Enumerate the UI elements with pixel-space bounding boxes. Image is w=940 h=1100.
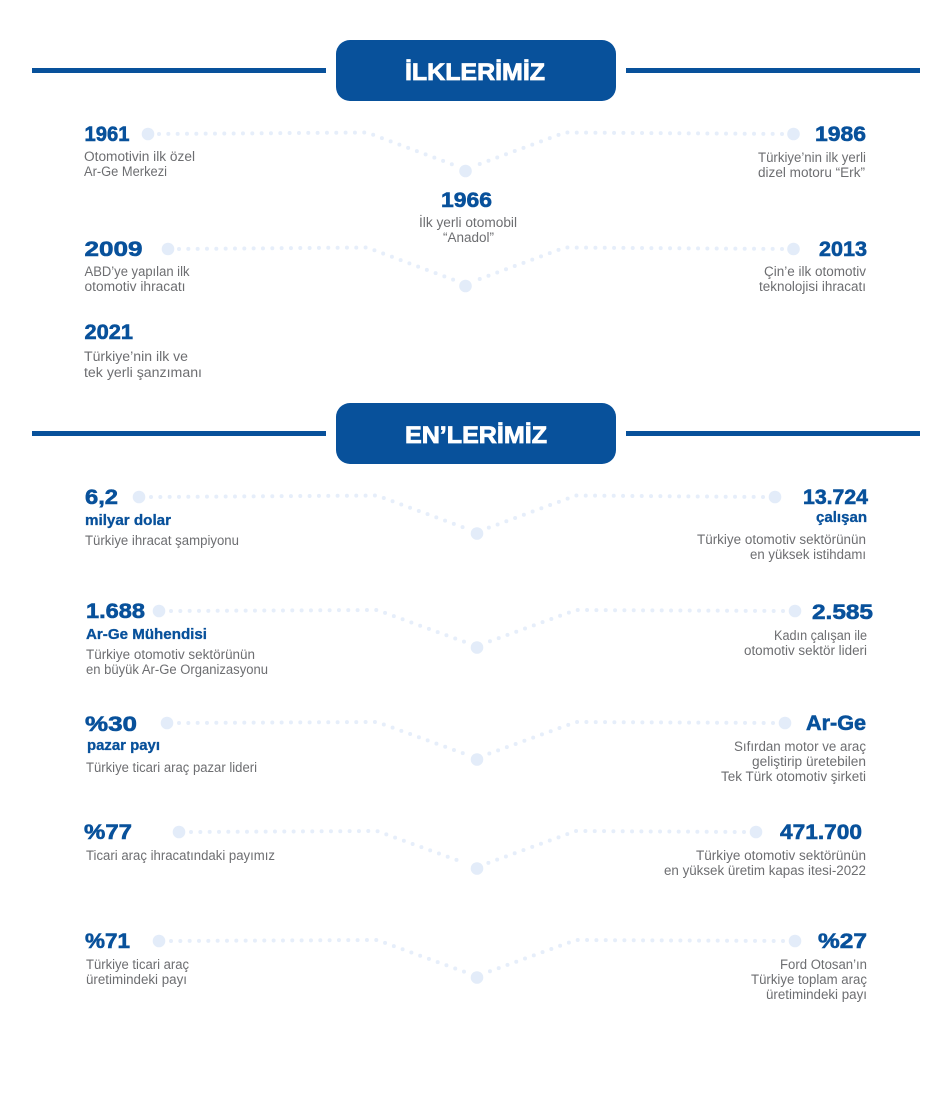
stat: 6,2 milyar dolar [85, 485, 239, 548]
milestone: 1986 [758, 122, 866, 180]
connector: row 4 [173, 826, 762, 875]
milestone: 2013: teknolojisi ihracatı [759, 279, 866, 294]
connector: row 5 [153, 935, 801, 984]
stat: 1.688 Ar-Ge Mühendisi: en büyük Ar-Ge Organizasyonu [86, 662, 268, 677]
connector: row 2 [153, 605, 801, 654]
heading: İlklerimiz banner: İLKLERİMİZ [405, 59, 545, 86]
stat: Ar-Ge: Ar-Ge [806, 711, 866, 735]
milestone: 2021: tek yerli şanzımanı [84, 365, 202, 380]
heading: En'lerimiz banner: EN’LERİMİZ [405, 422, 547, 449]
milestone: 2021: 2021 [84, 320, 133, 344]
stat: 6,2 milyar dolar: Türkiye ihracat şampiyonu [85, 533, 239, 548]
stat: %71 [85, 929, 189, 987]
stat: 2.585: otomotiv sektör lideri [744, 643, 867, 658]
heading: İlklerimiz banner [32, 40, 920, 101]
stat: 471.700: 471.700 [780, 820, 862, 844]
stat: 13.724 çalışan: en yüksek istihdamı [750, 547, 866, 562]
heading: En'lerimiz banner [32, 403, 920, 464]
stat: 13.724 çalışan: 13.724 [803, 485, 868, 509]
milestone: 1966: İlk yerli otomobil [419, 215, 517, 230]
stat: 471.700: en yüksek üretim kapas itesi-2022 [664, 863, 866, 878]
stat: Ar-Ge: Tek Türk otomotiv şirketi [721, 769, 866, 784]
stat: %77 [84, 820, 275, 863]
stat: 2.585 [744, 600, 873, 658]
stat: 2.585: 2.585 [812, 600, 873, 624]
milestone: 1966 [419, 188, 517, 245]
stat: 471.700 [664, 820, 866, 878]
stat: 1.688 Ar-Ge Mühendisi: Türkiye otomotiv sektörünün [86, 647, 255, 662]
stat: 1.688 Ar-Ge Mühendisi: 1.688 [86, 599, 145, 623]
milestone: 2009: ABD’ye yapılan ilk [84, 264, 190, 279]
stat: %27 [751, 929, 867, 1002]
stat: %27: üretimindeki payı [766, 987, 867, 1002]
stat: %30 pazar payı: pazar payı [87, 738, 160, 754]
milestone: 2013: 2013 [819, 237, 867, 261]
stat: 13.724 çalışan: çalışan [816, 510, 867, 526]
milestone: 2013: Çin’e ilk otomotiv [764, 264, 866, 279]
stat: %27: Ford Otosan’ın [780, 957, 867, 972]
stat: %30 pazar payı: %30 [85, 712, 137, 736]
milestone: 2009: 2009 [84, 237, 143, 261]
panel: En'lerimiz section [32, 403, 920, 1002]
milestone: 1986: Türkiye’nin ilk yerli [758, 150, 866, 165]
milestone: 1966: “Anadol” [443, 230, 494, 245]
milestone: 2009: otomotiv ihracatı [84, 279, 186, 294]
connector: 1961 to 1966 to 1986 [142, 128, 800, 177]
stat: %27: %27 [818, 929, 867, 953]
milestone: 2021 [84, 320, 202, 380]
stat: %30 pazar payı [85, 712, 257, 775]
stat: %77: %77 [84, 820, 132, 844]
stat: 6,2 milyar dolar: milyar dolar [85, 513, 171, 529]
milestone: 2009 [84, 237, 190, 294]
milestone: 1986: dizel motoru “Erk” [758, 165, 865, 180]
stat: 1.688 Ar-Ge Mühendisi: Ar-Ge Mühendisi [86, 627, 207, 643]
stat: Ar-Ge: Sıfırdan motor ve araç [734, 739, 866, 754]
milestone: 1961 [84, 122, 195, 179]
stat: 471.700: Türkiye otomotiv sektörünün [696, 848, 866, 863]
milestone: 2013 [759, 237, 867, 294]
stat: Ar-Ge [721, 711, 866, 784]
connector: 2009 to center to 2013 [162, 243, 800, 292]
milestone: 1986: 1986 [815, 122, 866, 146]
stat: %30 pazar payı: Türkiye ticari araç pazar lideri [86, 760, 257, 775]
connector: row 1 [133, 491, 781, 540]
stat: Ar-Ge: geliştirip üretebilen [752, 754, 866, 769]
stat: %71: üretimindeki payı [86, 972, 187, 987]
connector: row 3 [161, 717, 791, 766]
milestone: 2021: Türkiye’nin ilk ve [84, 349, 188, 364]
stat: %71: %71 [85, 929, 130, 953]
stat: %27: Türkiye toplam araç [751, 972, 867, 987]
milestone: 1961: 1961 [84, 122, 130, 146]
stat: 6,2 milyar dolar: 6,2 [85, 485, 118, 509]
stat: 1.688 Ar-Ge Mühendisi [86, 599, 268, 677]
panel: İlklerimiz section [32, 40, 920, 380]
stat: %71: Türkiye ticari araç [86, 957, 189, 972]
milestone: 1966: 1966 [441, 188, 492, 212]
milestone: 1961: Ar-Ge Merkezi [84, 164, 167, 179]
stat: 13.724 çalışan [697, 485, 868, 562]
milestone: 1961: Otomotivin ilk özel [84, 149, 195, 164]
stat: 13.724 çalışan: Türkiye otomotiv sektörünün [697, 532, 866, 547]
stat: %77: Ticari araç ihracatındaki payımız [86, 848, 275, 863]
stat: 2.585: Kadın çalışan ile [774, 628, 867, 643]
